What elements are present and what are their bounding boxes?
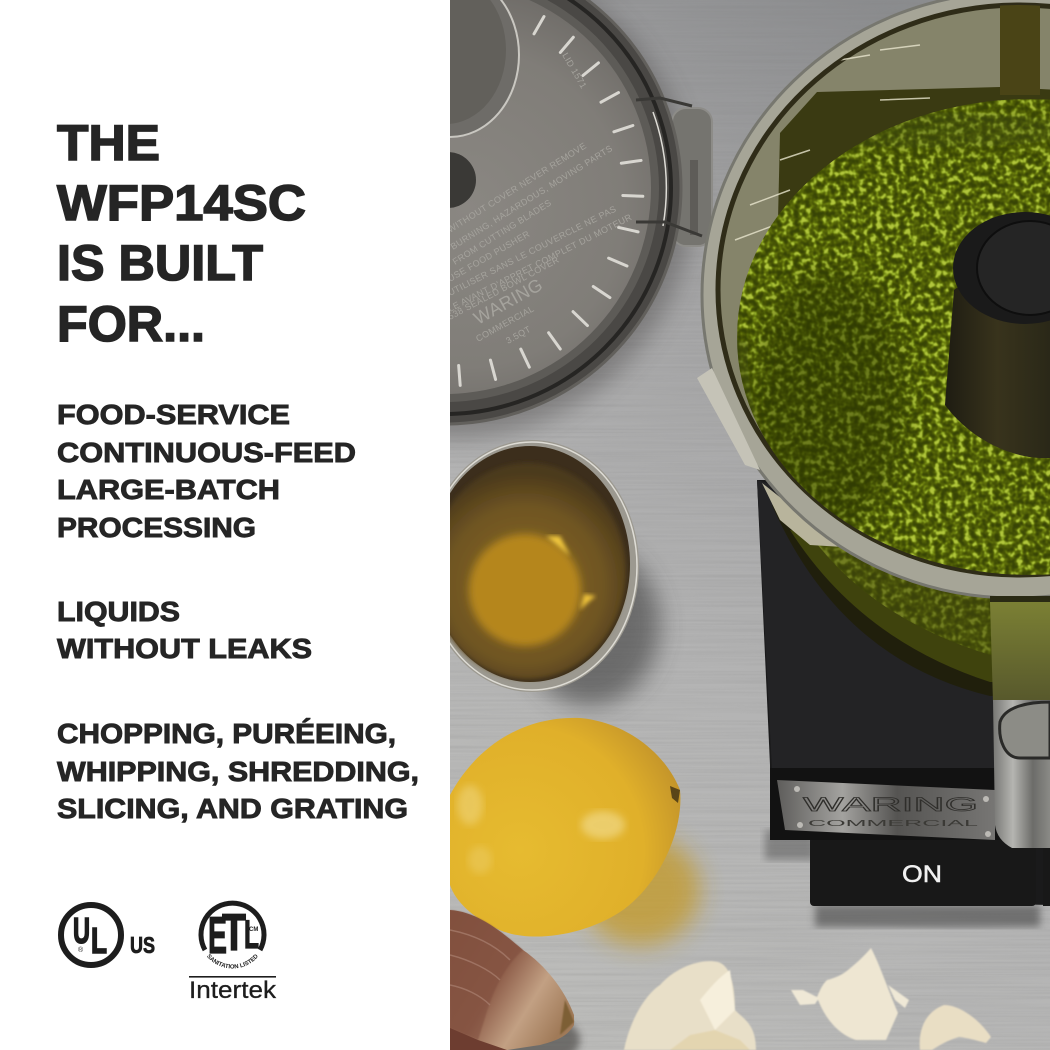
embossed lid lettering <box>446 51 634 346</box>
text block: liquids: WITHOUT LEAKS <box>57 633 312 664</box>
shallot <box>450 910 580 1050</box>
icon: ETL sanitation listed Intertek mark: L <box>244 913 259 957</box>
spout and feed tube <box>990 596 1050 848</box>
title: WFP14SC <box>57 175 306 231</box>
text block: functions: SLICING, AND GRATING <box>57 793 408 824</box>
embossed lid lettering: COMMERCIAL <box>474 303 536 344</box>
icon: UL US certification mark: US <box>130 932 155 958</box>
embossed lid lettering: 3.5QT <box>504 324 533 346</box>
embossed lid lettering: FROM CUTTING BLADES <box>451 197 553 267</box>
icon: ETL sanitation listed Intertek mark <box>189 900 277 1004</box>
icon: ETL sanitation listed Intertek mark: SANITATION LISTED <box>207 954 258 969</box>
feed guide inside bowl <box>1000 0 1040 95</box>
title: FOR... <box>57 296 205 352</box>
text block: functions: CHOPPING, PURÉEING, <box>57 718 396 749</box>
text block: food-service use: CONTINUOUS-FEED <box>57 437 356 468</box>
text block: food-service use: PROCESSING <box>57 512 256 543</box>
bowl of olive oil <box>425 440 660 705</box>
text block: food-service use: FOOD-SERVICE <box>57 399 290 430</box>
icon: ETL sanitation listed Intertek mark: E <box>208 907 227 965</box>
steel countertop <box>450 0 1050 1050</box>
oil on bowl wall <box>778 87 1050 216</box>
Waring metal nameplate: COMMERCIAL <box>808 819 980 828</box>
lid latch clips <box>636 98 702 236</box>
icon: ETL sanitation listed Intertek mark: CM <box>249 927 258 933</box>
left white panel <box>56 115 419 1004</box>
lid measurement ticks <box>459 17 643 385</box>
icon: UL US certification mark: L <box>91 920 107 961</box>
icon: ETL sanitation listed Intertek mark: Intertek <box>189 977 277 1004</box>
embossed lid lettering: LID 1571 <box>560 51 589 90</box>
processor bowl <box>697 0 1050 848</box>
ON button: ON <box>902 861 942 888</box>
text block: functions: WHIPPING, SHREDDING, <box>57 756 419 787</box>
text block: food-service use: LARGE-BATCH <box>57 474 280 505</box>
centre post <box>945 212 1050 458</box>
text block: functions <box>57 718 419 824</box>
icon: UL US certification mark: ® <box>78 946 84 954</box>
text block: liquids <box>57 596 312 664</box>
title: IS BUILT <box>57 235 263 291</box>
bowl lid <box>450 0 713 448</box>
embossed lid lettering: LE AVANT D'APPRET COMPLET DU MOTEUR <box>446 212 634 314</box>
title: THE <box>57 115 160 171</box>
text block: food-service use <box>57 399 356 543</box>
icon: ETL sanitation listed Intertek mark: T <box>222 904 246 962</box>
embossed lid lettering: 538 SEALED BOWL COVER <box>446 254 561 322</box>
garlic cloves <box>624 948 991 1050</box>
embossed lid lettering: BURNING, HAZARDOUS, MOVING PARTS <box>449 143 614 252</box>
text block: liquids: LIQUIDS <box>57 596 180 627</box>
icon: UL US certification mark <box>61 905 155 965</box>
photo panel: food processor on steel counter <box>450 0 1050 1050</box>
pesto <box>736 99 1050 575</box>
lid center knob <box>450 0 520 208</box>
embossed lid lettering: WARING <box>470 274 546 328</box>
embossed lid lettering: WITHOUT COVER NEVER REMOVE <box>446 141 588 235</box>
icon: UL US certification mark: U <box>73 910 90 951</box>
embossed lid lettering: USE FOOD PUSHER <box>446 229 532 284</box>
Waring metal nameplate <box>777 780 995 840</box>
ON button <box>810 865 1050 906</box>
food processor base <box>757 480 1050 927</box>
Waring metal nameplate: WARING <box>803 795 978 816</box>
lemon <box>450 718 700 945</box>
title <box>57 115 306 352</box>
embossed lid lettering: UTILISER SANS LE COUVERCLE NE PAS <box>446 204 618 298</box>
